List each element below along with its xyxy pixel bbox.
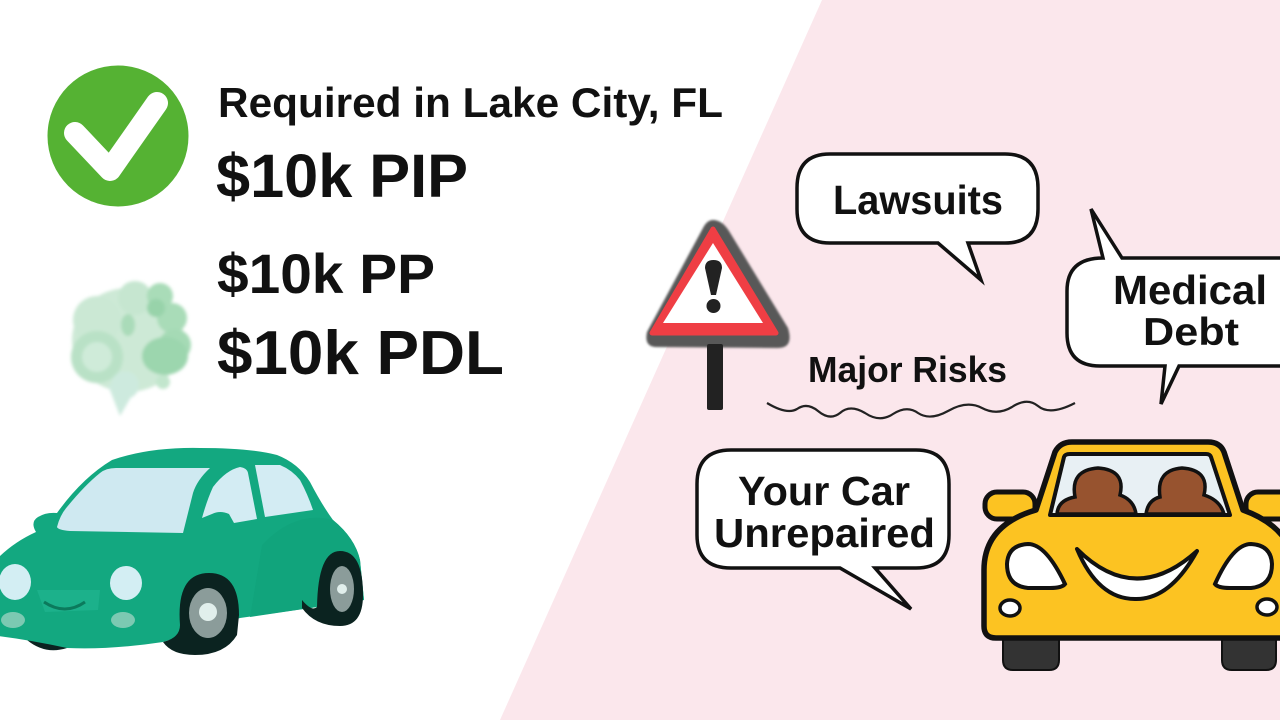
panel: pink risk background xyxy=(500,0,1280,720)
text: PDL: $10k PDL xyxy=(217,319,504,388)
callout: medical debt: Medical xyxy=(1113,267,1267,313)
icon: yellow car xyxy=(984,442,1280,670)
callout: medical debt: Debt xyxy=(1143,311,1239,354)
callout: lawsuits xyxy=(797,154,1038,280)
callout: your car unrepaired: Your Car xyxy=(738,468,910,514)
text: PIP: $10k PIP xyxy=(216,142,468,210)
label: major risks: Major Risks xyxy=(808,349,1007,390)
callout: your car unrepaired xyxy=(697,450,949,609)
heading: required: Required in Lake City, FL xyxy=(218,79,723,126)
icon: warning sign xyxy=(646,220,790,410)
icon: green check xyxy=(48,66,188,206)
icon: green smoke cloud xyxy=(71,281,191,416)
callout: lawsuits: Lawsuits xyxy=(833,177,1003,223)
squiggle underline xyxy=(767,402,1075,418)
text: PP: $10k PP xyxy=(217,242,435,305)
icon: green car xyxy=(0,448,364,655)
callout: medical debt xyxy=(1067,209,1280,404)
callout: your car unrepaired: Unrepaired xyxy=(714,510,935,556)
